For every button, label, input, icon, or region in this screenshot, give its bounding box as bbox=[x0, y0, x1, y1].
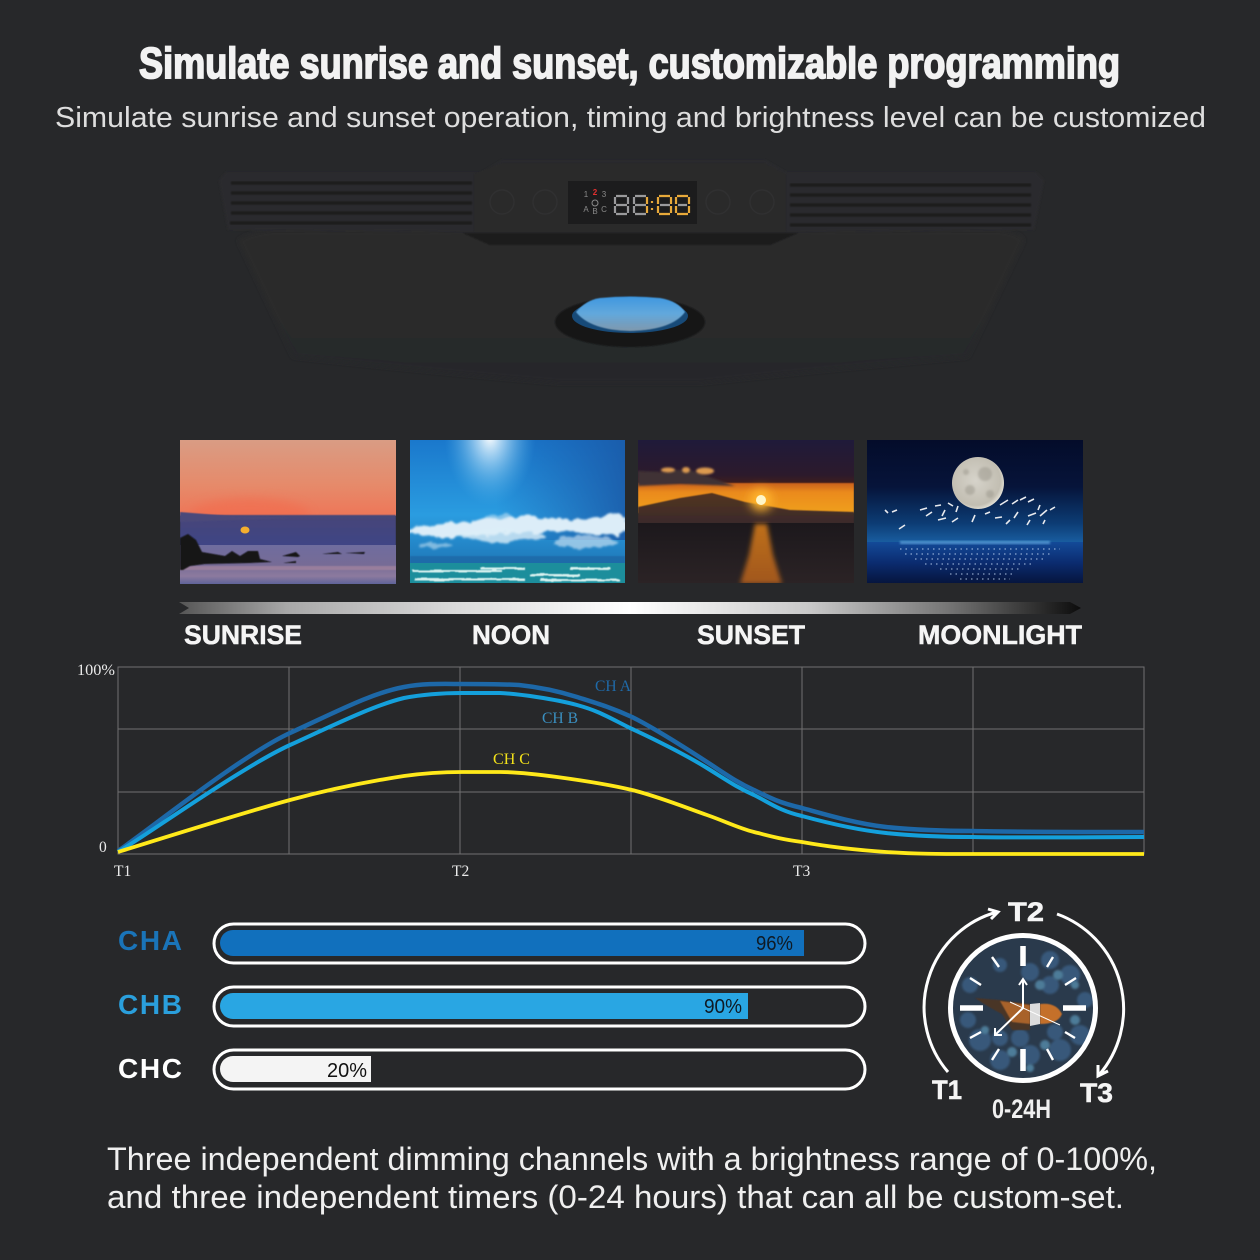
timer clock bbox=[924, 897, 1124, 1124]
axis labels: T2 bbox=[452, 863, 469, 880]
sun bbox=[750, 489, 772, 511]
clock hands bbox=[995, 979, 1060, 1035]
label: sunrise: SUNRISE bbox=[184, 620, 302, 650]
curve: CH B bbox=[118, 693, 1144, 852]
orange digit segments bbox=[647, 196, 689, 214]
left vents bbox=[230, 183, 472, 223]
hill bbox=[638, 493, 854, 524]
lamp lower body bbox=[238, 230, 1024, 383]
timeline arrow bbox=[179, 602, 1081, 614]
lens bbox=[555, 296, 705, 347]
aquarium light fixture bbox=[219, 160, 1044, 383]
label: moonlight: MOONLIGHT bbox=[918, 620, 1082, 650]
timer numbers: 3 bbox=[602, 190, 607, 199]
display screen bbox=[568, 181, 697, 224]
sparkles bbox=[900, 549, 1060, 579]
channel bar: CHB bbox=[118, 987, 865, 1026]
bottom description bbox=[107, 1141, 1157, 1215]
channel bar: CHC bbox=[118, 1050, 865, 1089]
arc arrow T2 to T3 bbox=[1057, 914, 1124, 1076]
clock ring bbox=[950, 936, 1096, 1080]
label: noon: NOON bbox=[472, 620, 550, 650]
axis labels: 0 bbox=[99, 839, 107, 856]
CHB fill bbox=[220, 993, 748, 1019]
label 0-24H: 0-24H bbox=[992, 1094, 1051, 1124]
timer numbers: 1 bbox=[584, 190, 589, 199]
subtitle: Simulate sunrise and sunset operation, timing and brightness level can be customized bbox=[55, 102, 1206, 134]
description line 1: Three independent dimming channels with a brightness range of 0-100%, bbox=[107, 1141, 1157, 1177]
timer numbers: 2 bbox=[593, 188, 598, 197]
curve label: CH B: CH B bbox=[542, 710, 578, 727]
photo: noon bbox=[407, 436, 632, 583]
buttons bbox=[490, 190, 774, 214]
chart grid bbox=[118, 667, 1144, 854]
right vents bbox=[790, 185, 1031, 225]
clock photo face bbox=[953, 938, 1093, 1078]
curve label: CH C: CH C bbox=[493, 751, 530, 768]
clock glyph bbox=[592, 200, 598, 206]
CHA value: 96% bbox=[756, 933, 793, 955]
timer numbers: A bbox=[583, 205, 589, 214]
timer numbers bbox=[583, 188, 607, 216]
shore silhouette bbox=[180, 534, 365, 570]
CHC track bbox=[214, 1050, 865, 1089]
label T1: T1 bbox=[932, 1075, 962, 1105]
curve: CH A bbox=[118, 684, 1144, 851]
CHC fill bbox=[220, 1056, 371, 1082]
CHA fill bbox=[220, 930, 804, 956]
CHB value: 90% bbox=[704, 996, 742, 1018]
curve label: CH A: CH A bbox=[595, 678, 632, 695]
minor ticks bbox=[970, 957, 1076, 1060]
CHA track bbox=[214, 924, 865, 963]
birds bbox=[885, 497, 1055, 529]
CHC value: 20% bbox=[327, 1060, 367, 1082]
clouds bbox=[638, 470, 735, 486]
control panel shadow bbox=[463, 233, 798, 245]
CHC label: CHC bbox=[118, 1053, 182, 1084]
label T2: T2 bbox=[1008, 897, 1044, 927]
clouds bbox=[407, 513, 632, 549]
photo: sunrise bbox=[180, 440, 396, 584]
time-of-day labels bbox=[184, 620, 1082, 650]
photo: sunset bbox=[638, 440, 854, 584]
gray digit segments bbox=[615, 196, 687, 214]
sea bbox=[638, 523, 854, 566]
sun bbox=[240, 526, 250, 534]
label T3: T3 bbox=[1080, 1078, 1113, 1108]
lamp top housing bbox=[219, 160, 1044, 232]
CHA label: CHA bbox=[118, 925, 182, 956]
photo: moonlight bbox=[867, 440, 1083, 583]
sea bbox=[410, 563, 625, 583]
label: sunset: SUNSET bbox=[697, 620, 805, 650]
curve: CH C bbox=[118, 772, 1144, 854]
line chart: channel brightness over time bbox=[77, 662, 1144, 880]
timer numbers: C bbox=[601, 205, 607, 214]
hour ticks bbox=[960, 946, 1086, 1071]
timer numbers: B bbox=[592, 207, 598, 216]
axis labels: 100% bbox=[77, 662, 115, 679]
description line 2: and three independent timers (0-24 hours) that can all be custom-set. bbox=[107, 1179, 1124, 1215]
axis labels: T1 bbox=[114, 863, 131, 880]
axis labels bbox=[77, 662, 810, 880]
CHB label: CHB bbox=[118, 989, 182, 1020]
clownfish bbox=[975, 998, 1030, 1030]
control panel bbox=[474, 163, 786, 232]
CHB track bbox=[214, 987, 865, 1026]
arc arrow T1 to T2 bbox=[924, 909, 998, 1072]
channel bar: CHA bbox=[118, 924, 865, 963]
moon bbox=[952, 457, 1004, 509]
axis labels: T3 bbox=[793, 863, 810, 880]
